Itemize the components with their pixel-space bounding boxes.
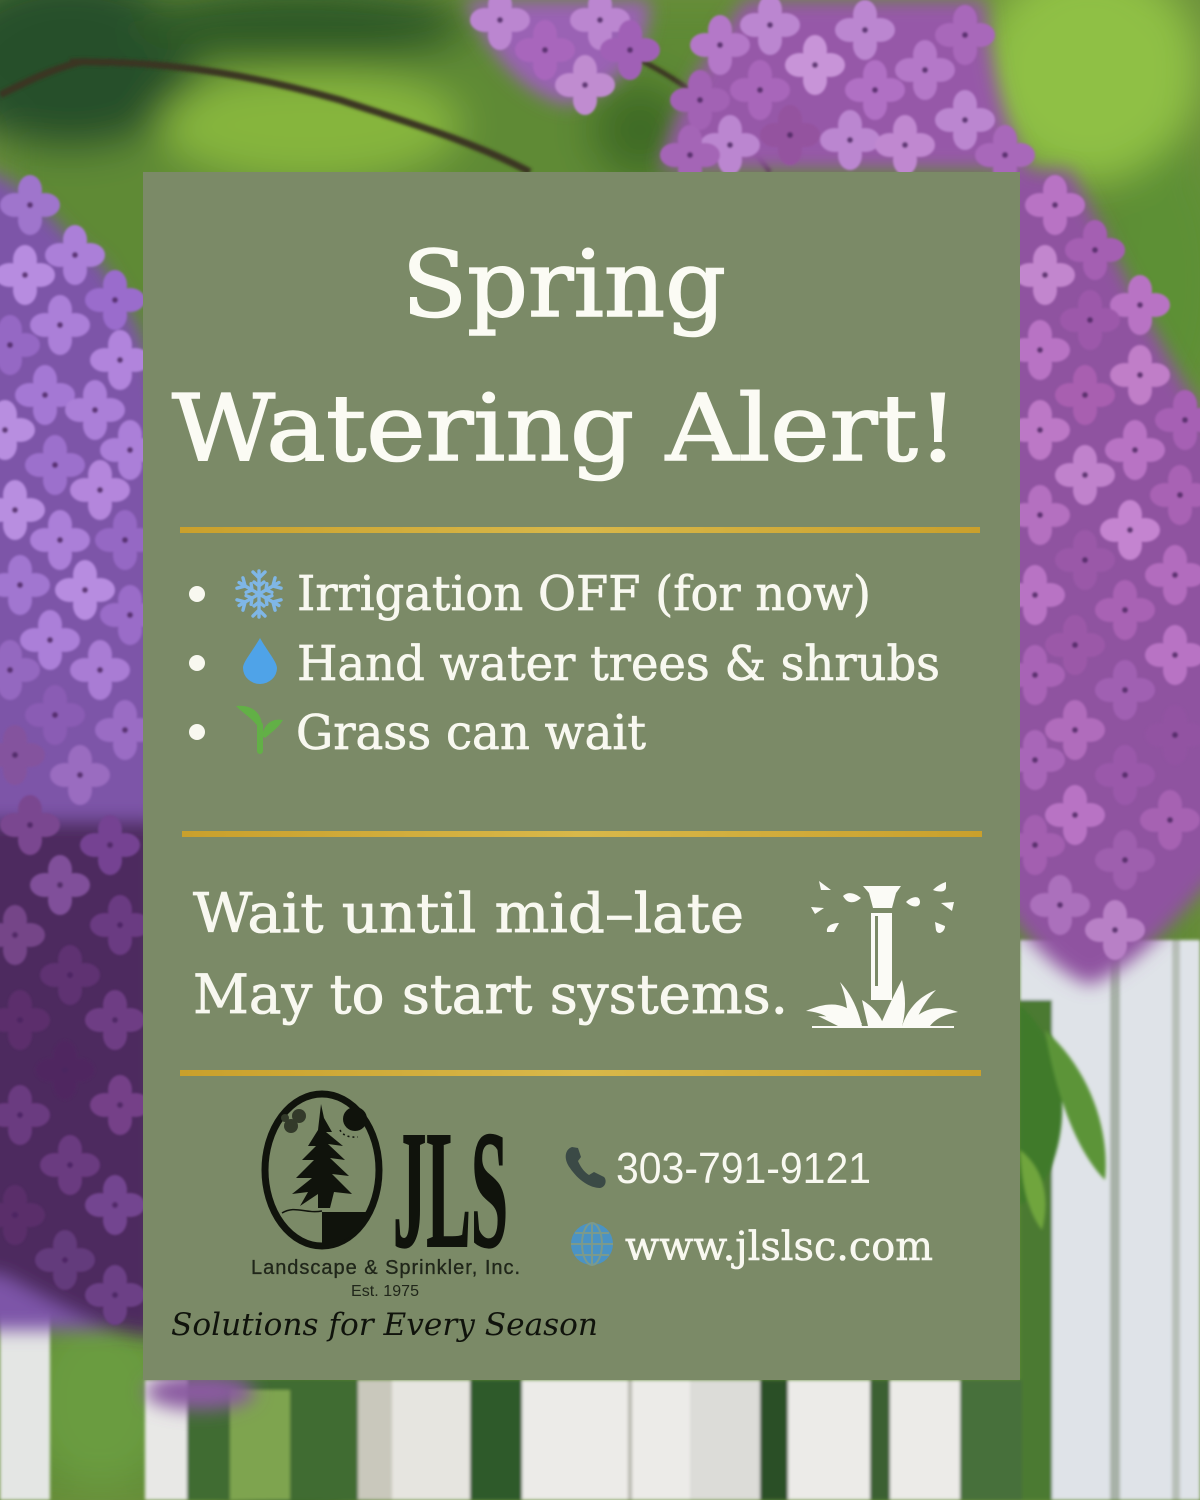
lilac florets: left cluster (0, 175, 160, 1325)
gold divider (180, 1070, 981, 1076)
text: phone number: 303-791-9121 (616, 1144, 871, 1193)
icon: snowflake (236, 571, 282, 617)
callout: wait until mid-late May: Wait until mid–late (193, 882, 744, 945)
callout: wait until mid-late May (193, 882, 788, 1026)
title: Watering Alert!: Watering Alert! (172, 375, 958, 482)
text: website: www.jlslsc.com (625, 1224, 933, 1270)
icon: seedling (236, 706, 283, 754)
title: Spring: Spring (402, 231, 726, 338)
text: irrigation off: Irrigation OFF (for now) (297, 566, 871, 622)
icon: sprinkler (806, 881, 958, 1028)
panel: notice card (143, 172, 1020, 1380)
callout: wait until mid-late May: May to start systems. (193, 963, 788, 1026)
fence posts (0, 940, 1200, 1500)
bullet list (189, 566, 940, 761)
established year: Est. 1975 (351, 1283, 419, 1300)
icon: phone (566, 1147, 606, 1188)
text: grass can wait: Grass can wait (296, 705, 646, 761)
logo: JLS Landscape & Sprinkler: JLS (393, 1097, 508, 1283)
lilac florets: top cluster (470, 0, 1035, 185)
icon: globe (571, 1223, 613, 1265)
text: hand water: Hand water trees & shrubs (297, 636, 940, 692)
bullet dots (189, 586, 205, 740)
leaves on fence (1020, 1005, 1106, 1230)
contact details (566, 1144, 933, 1270)
icon: water drop (243, 638, 277, 684)
company name: Landscape & Sprinkler, Inc. (251, 1257, 520, 1279)
gold divider (182, 831, 982, 837)
gold divider (180, 527, 980, 533)
lilac florets: right cluster (1005, 175, 1200, 960)
logo oval with tree (265, 1094, 379, 1246)
branches (0, 60, 770, 172)
tagline: Solutions for Every Season (171, 1307, 598, 1343)
logo: JLS Landscape & Sprinkler (171, 1094, 598, 1343)
